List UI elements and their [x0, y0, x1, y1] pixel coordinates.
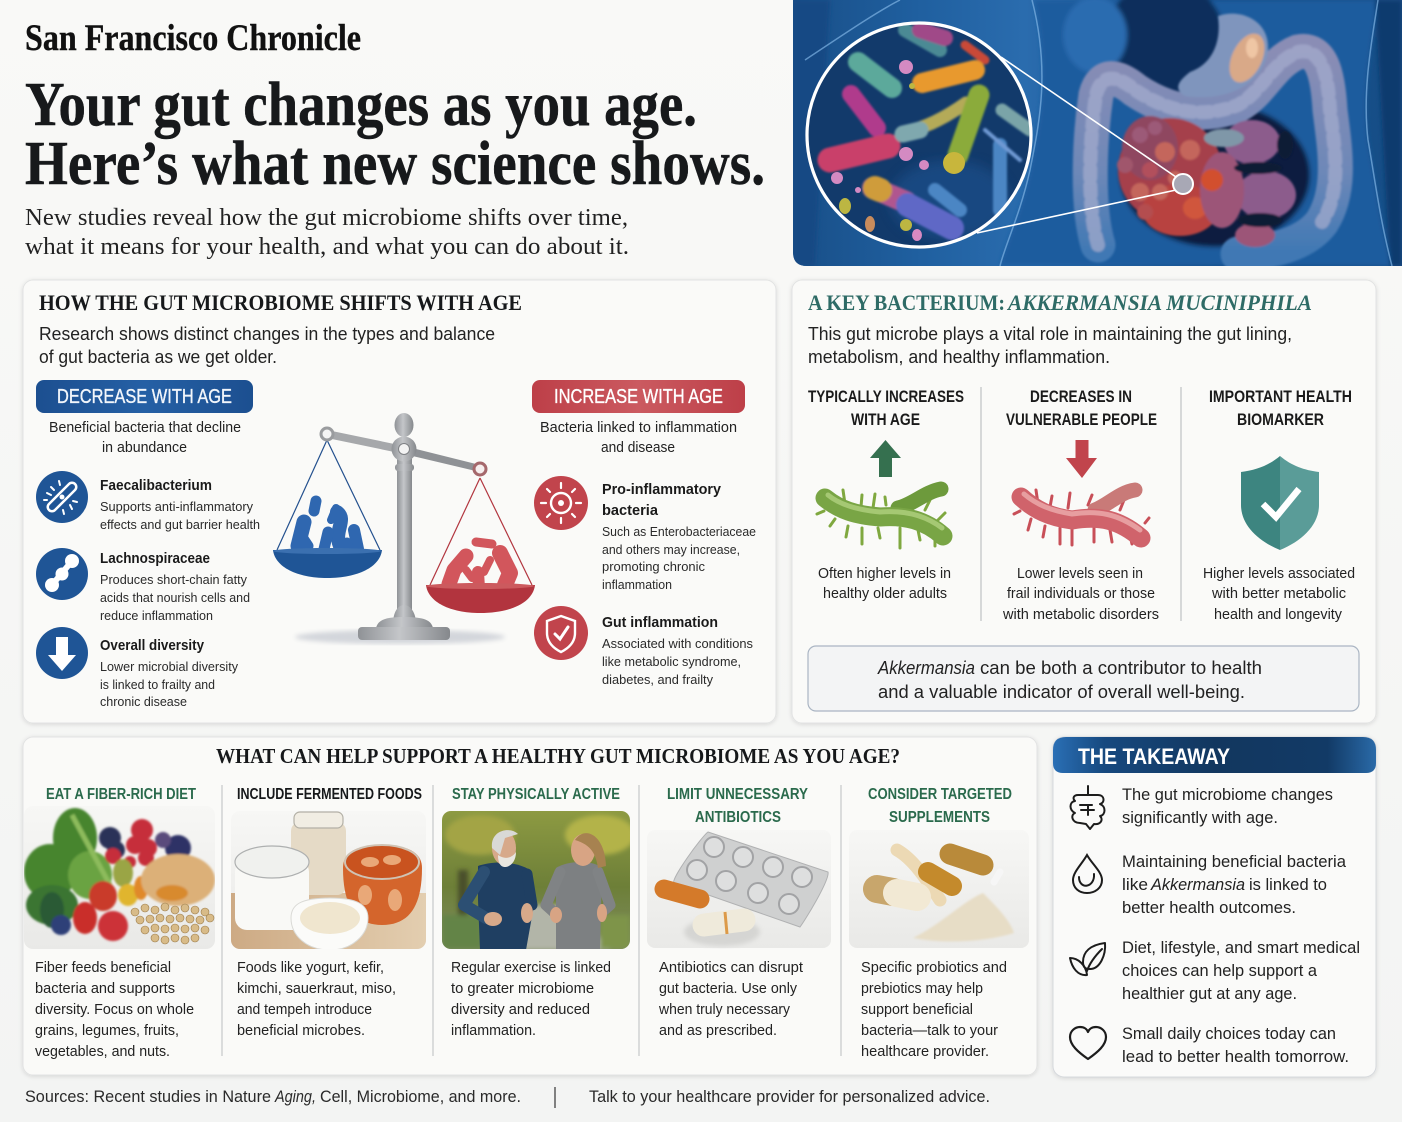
intro text	[808, 324, 1292, 367]
beam and stand	[321, 413, 486, 640]
footer: sources: Sources: Recent studies in Nature	[25, 1088, 271, 1106]
takeaway: microbiome changes: The gut microbiome changes	[1122, 785, 1333, 804]
item: pro-inflammatory bacteria	[534, 476, 756, 592]
item: Faecalibacterium: Supports anti-inflammatory	[100, 499, 253, 514]
takeaway: small daily choices: lead to better health tomorrow.	[1122, 1047, 1349, 1066]
badge: increase with age: INCREASE WITH AGE	[554, 386, 723, 408]
column: fiber-rich diet: bacteria and supports	[35, 981, 175, 997]
column: decreases in vulnerable people: DECREASES IN	[1030, 388, 1132, 406]
column: targeted supplements: bacteria—talk to your	[861, 1023, 998, 1039]
icon: drop	[1073, 855, 1102, 893]
column: limit antibiotics: when truly necessary	[658, 1002, 791, 1018]
icon: teal shield with check	[1241, 456, 1319, 550]
column: fermented foods: Foods like yogurt, kefir,	[237, 960, 384, 976]
column: targeted supplements	[849, 786, 1029, 1060]
icon: down arrow	[36, 627, 88, 679]
icon: intestine	[1070, 786, 1104, 829]
column: limit antibiotics	[647, 786, 831, 1039]
column: fermented foods	[231, 786, 426, 1039]
small intestine	[1118, 116, 1222, 236]
text: beneficial bacteria	[49, 420, 241, 456]
magnifier connector lines	[977, 57, 1176, 233]
column: limit antibiotics: and as prescribed.	[659, 1023, 777, 1039]
column: decreases in vulnerable people: frail individuals or those	[1007, 586, 1155, 602]
takeaway: beneficial bacteria: Maintaining beneficial bacteria	[1122, 852, 1347, 871]
column: physically active: STAY PHYSICALLY ACTIVE	[452, 786, 620, 803]
column: fermented foods: beneficial microbes.	[237, 1023, 365, 1039]
column: important health biomarker	[1203, 388, 1355, 623]
icon: heart	[1070, 1027, 1106, 1059]
callout: and a valuable indicator of overall well-being.	[878, 682, 1245, 702]
intro text: of gut bacteria as we get older.	[39, 347, 277, 367]
column: physically active: diversity and reduced	[451, 1002, 590, 1018]
text: bacteria linked to inflammation: Bacteria linked to inflammation	[540, 420, 737, 436]
item: Faecalibacterium	[36, 471, 260, 532]
panel: how the gut microbiome shifts with age	[23, 280, 776, 723]
takeaway header	[1053, 737, 1376, 773]
title: Here’s what new science shows.	[25, 130, 765, 198]
panel: what can help	[23, 737, 1037, 1075]
takeaway: lifestyle choices	[1070, 938, 1360, 1003]
intro text: Research shows distinct changes in the types and balance	[39, 324, 495, 344]
takeaway: microbiome changes: significantly with age.	[1122, 808, 1278, 827]
column: fermented foods: INCLUDE FERMENTED FOODS	[237, 786, 422, 803]
footer: sources	[25, 1088, 521, 1106]
hero illustration: human gut with magnified bacteria	[793, 0, 1402, 266]
item: pro-inflammatory bacteria: bacteria	[602, 502, 659, 519]
subtitle: what it means for your health, and what you can do about it.	[25, 234, 629, 260]
item: overall diversity: is linked to frailty and	[100, 677, 215, 692]
masthead: San Francisco Chronicle: San Francisco Chronicle	[25, 18, 361, 59]
column: typically increases with age: healthy older adults	[823, 586, 947, 602]
footer: advice: Talk to your healthcare provider for personalized advice.	[589, 1088, 990, 1106]
green bacterium	[817, 489, 945, 548]
man	[478, 863, 534, 950]
item: Lachnospiraceae: Lachnospiraceae	[100, 550, 210, 567]
arrow down	[1066, 440, 1097, 478]
badge: decrease with age: DECREASE WITH AGE	[57, 386, 232, 408]
column: physically active: Regular exercise is linked	[451, 960, 611, 976]
text: beneficial bacteria: Beneficial bacteria that decline	[49, 420, 241, 436]
item: Lachnospiraceae: acids that nourish cells and	[100, 590, 250, 605]
colon	[1090, 14, 1335, 254]
right pan with red bacteria	[426, 478, 535, 613]
column: important health biomarker: BIOMARKER	[1237, 411, 1324, 429]
text: bacteria linked to inflammation: and disease	[601, 440, 675, 456]
item: Faecalibacterium: Faecalibacterium	[100, 477, 212, 494]
item: overall diversity	[36, 627, 238, 709]
footer: sources: Cell, Microbiome, and more.	[320, 1088, 521, 1106]
heading	[808, 290, 1312, 315]
panel: a key bacterium	[792, 280, 1376, 723]
column: fiber-rich diet: Fiber feeds beneficial	[35, 960, 171, 976]
column: fermented foods: and tempeh introduce	[237, 1002, 372, 1018]
image: vegetables, fruit and grains	[24, 806, 215, 949]
column: fermented foods: kimchi, sauerkraut, miso,	[237, 981, 396, 997]
subtitle	[25, 205, 629, 260]
item: gut inflammation: Gut inflammation	[602, 614, 718, 631]
column: fiber-rich diet: EAT A FIBER-RICH DIET	[46, 786, 196, 803]
item: overall diversity: Overall diversity	[100, 637, 205, 654]
title: Your gut changes as you age.	[25, 71, 697, 139]
takeaway: beneficial bacteria: is linked to	[1249, 875, 1327, 894]
callout: Akkermansia	[877, 658, 975, 678]
red bacterium	[1014, 490, 1149, 545]
item: pro-inflammatory bacteria: and others may increase,	[602, 542, 740, 557]
item: gut inflammation: diabetes, and frailty	[602, 672, 713, 687]
column: typically increases with age	[808, 388, 964, 602]
magnifying lens with bacteria	[800, 20, 1040, 250]
callout: can be both a contributor to health	[980, 658, 1262, 678]
takeaway: beneficial bacteria	[1073, 852, 1347, 917]
column: typically increases with age: Often higher levels in	[818, 566, 951, 582]
column: fiber-rich diet: diversity. Focus on whole	[35, 1002, 194, 1018]
column: decreases in vulnerable people: VULNERABLE PEOPLE	[1006, 411, 1157, 429]
takeaway: beneficial bacteria: better health outcomes.	[1122, 898, 1296, 917]
takeaway: beneficial bacteria: like	[1122, 875, 1148, 894]
text: bacteria linked to inflammation	[540, 420, 737, 456]
badge: decrease with age	[36, 380, 253, 413]
item: Lachnospiraceae: reduce inflammation	[100, 608, 213, 623]
column: fiber-rich diet	[24, 786, 215, 1060]
magnified spot	[1173, 174, 1193, 194]
icon: leaf	[1070, 943, 1105, 975]
takeaway: small daily choices: Small daily choices today can	[1122, 1024, 1336, 1043]
takeaway header: THE TAKEAWAY	[1078, 744, 1230, 769]
image: capsules and powder	[849, 830, 1029, 948]
column: targeted supplements: healthcare provider.	[861, 1044, 989, 1060]
column: important health biomarker: IMPORTANT HEALTH	[1209, 388, 1352, 406]
item: Lachnospiraceae: Produces short-chain fatty	[100, 572, 247, 587]
takeaway: lifestyle choices: healthier gut at any age.	[1122, 984, 1297, 1003]
item: overall diversity: Lower microbial diversity	[100, 659, 238, 674]
text: beneficial bacteria: in abundance	[102, 440, 187, 456]
column: physically active: inflammation.	[451, 1023, 536, 1039]
column: limit antibiotics: LIMIT UNNECESSARY	[667, 786, 808, 803]
column: decreases in vulnerable people: with metabolic disorders	[1002, 607, 1159, 623]
takeaway: lifestyle choices: choices can help support a	[1122, 961, 1318, 980]
footer: sources: Aging,	[274, 1088, 316, 1106]
stomach	[1178, 14, 1268, 97]
callout	[808, 646, 1359, 711]
heading: HOW THE GUT MICROBIOME SHIFTS WITH AGE	[39, 290, 522, 315]
icon: shield	[534, 606, 588, 660]
column: targeted supplements: Specific probiotics and	[861, 960, 1007, 976]
heading: A KEY BACTERIUM:	[808, 290, 1005, 315]
image: couple jogging	[442, 811, 635, 950]
item: pro-inflammatory bacteria: promoting chronic	[602, 559, 705, 574]
arrow up	[870, 440, 901, 477]
badge: increase with age	[532, 380, 745, 413]
takeaway: small daily choices	[1070, 1024, 1349, 1066]
takeaway: microbiome changes	[1070, 785, 1333, 829]
icon: chain of cells	[36, 548, 88, 600]
column: decreases in vulnerable people: Lower levels seen in	[1017, 566, 1143, 582]
item: pro-inflammatory bacteria: inflammation	[602, 577, 672, 592]
column: targeted supplements: support beneficial	[861, 1002, 973, 1018]
item: pro-inflammatory bacteria: Pro-inflammatory	[602, 481, 722, 498]
column: targeted supplements: prebiotics may help	[861, 981, 983, 997]
item: gut inflammation: Associated with conditions	[602, 636, 753, 651]
column: important health biomarker: health and longevity	[1214, 607, 1343, 623]
heading: AKKERMANSIA MUCINIPHILA	[1006, 290, 1312, 315]
takeaway: lifestyle choices: Diet, lifestyle, and smart medical	[1122, 938, 1360, 957]
icon: spiky microbe	[534, 476, 588, 530]
image: blister pack and capsules	[647, 830, 831, 948]
column: typically increases with age: WITH AGE	[851, 411, 920, 429]
panel: the takeaway	[1053, 737, 1376, 1077]
column: important health biomarker: Higher levels associated	[1203, 566, 1355, 582]
column: targeted supplements: SUPPLEMENTS	[889, 809, 990, 826]
left pan with blue bacteria	[273, 440, 382, 578]
column: fiber-rich diet: vegetables, and nuts.	[35, 1044, 170, 1060]
column: physically active: to greater microbiome	[451, 981, 594, 997]
column: decreases in vulnerable people	[1002, 388, 1159, 623]
column: targeted supplements: CONSIDER TARGETED	[868, 786, 1012, 803]
intro text: This gut microbe plays a vital role in maintaining the gut lining,	[808, 324, 1292, 344]
intro text	[39, 324, 495, 367]
image: yogurt, kefir and kimchi	[231, 811, 426, 950]
title	[25, 71, 765, 198]
item: gut inflammation: like metabolic syndrome,	[602, 654, 741, 669]
subtitle: New studies reveal how the gut microbiome shifts over time,	[25, 205, 628, 231]
column: limit antibiotics: gut bacteria. Use only	[659, 981, 798, 997]
balance scale illustration	[273, 413, 535, 644]
item: Faecalibacterium: effects and gut barrier health	[100, 517, 260, 532]
item: overall diversity: chronic disease	[100, 694, 187, 709]
item: gut inflammation	[534, 606, 753, 687]
column: important health biomarker: with better metabolic	[1211, 586, 1346, 602]
column: typically increases with age: TYPICALLY INCREASES	[808, 388, 964, 406]
item: Lachnospiraceae	[36, 548, 250, 623]
column: physically active	[442, 786, 635, 1039]
column: limit antibiotics: Antibiotics can disrupt	[659, 960, 803, 976]
item: pro-inflammatory bacteria: Such as Enterobacteriaceae	[602, 524, 756, 539]
icon: bacterium	[36, 471, 88, 523]
woman	[556, 862, 602, 950]
takeaway: beneficial bacteria: Akkermansia	[1150, 875, 1245, 894]
heading: WHAT CAN HELP SUPPORT A HEALTHY GUT MICROBIOME AS YOU AGE?	[216, 744, 900, 768]
intro text: metabolism, and healthy inflammation.	[808, 347, 1110, 367]
column: limit antibiotics: ANTIBIOTICS	[695, 809, 781, 826]
column: fiber-rich diet: grains, legumes, fruits,	[35, 1023, 179, 1039]
